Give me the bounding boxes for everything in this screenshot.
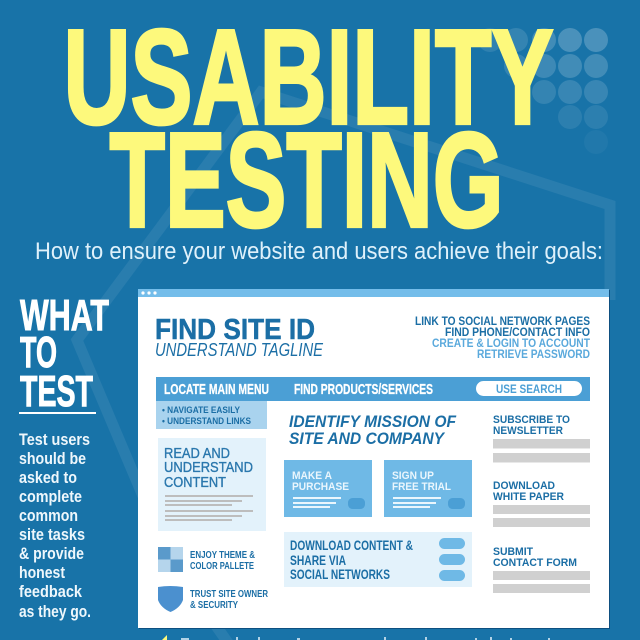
sidebar: white paper: WHITE PAPER	[493, 491, 564, 503]
panel: what to test	[19, 291, 109, 621]
card: make a purchase	[284, 460, 372, 517]
background: faint arrow outline	[77, 92, 610, 640]
text block: what to test description: & provide	[19, 545, 84, 563]
site id heading: FIND SITE ID	[155, 314, 315, 346]
heading: what to test: TO	[20, 328, 57, 377]
theme label: ENJOY THEME &	[190, 550, 255, 561]
text block: what to test description: as they go.	[19, 603, 91, 621]
submenu	[156, 401, 267, 429]
sidebar: white paper: DOWNLOAD	[493, 480, 555, 492]
sidebar: contact form: CONTACT FORM	[493, 557, 577, 569]
top right links: RETRIEVE PASSWORD	[477, 349, 590, 361]
navigation bar: LOCATE MAIN MENU	[164, 382, 269, 398]
theme label: COLOR PALLETE	[190, 561, 254, 572]
text block: what to test description: feedback	[19, 583, 83, 601]
mission heading: SITE AND COMPANY	[289, 430, 446, 448]
card: make a purchase: PURCHASE	[292, 481, 349, 493]
icon: shield	[158, 586, 183, 612]
read content box: READ AND	[164, 446, 230, 462]
icon: yellow marker cropped at bottom edge	[161, 635, 167, 640]
submenu: • NAVIGATE EASILY	[162, 405, 240, 415]
trust label	[190, 589, 269, 611]
heading: what to test	[20, 291, 109, 416]
read content box	[158, 438, 266, 531]
sidebar: subscribe: NEWSLETTER	[493, 425, 563, 437]
text block: what to test description: honest	[19, 564, 65, 582]
sidebar: subscribe: SUBSCRIBE TO	[493, 414, 570, 426]
read content box: UNDERSTAND	[164, 460, 253, 476]
text block: what to test description: asked to	[19, 469, 77, 487]
sidebar: contact form: SUBMIT	[493, 546, 533, 558]
card: sign up free trial: FREE TRIAL	[392, 481, 451, 493]
mission heading	[289, 413, 457, 448]
card: download and share	[284, 532, 472, 587]
trust label: TRUST SITE OWNER	[190, 589, 269, 600]
sidebar: white paper	[493, 480, 590, 527]
site id heading: UNDERSTAND TAGLINE	[155, 340, 324, 360]
submenu: • UNDERSTAND LINKS	[162, 416, 251, 426]
top right links	[415, 316, 590, 361]
site id heading	[155, 314, 324, 360]
subtitle: How to ensure your website and users achieve their goals:	[35, 238, 603, 265]
navigation bar	[156, 377, 590, 401]
card: sign up free trial: SIGN UP	[392, 470, 434, 482]
text block: what to test description: site tasks	[19, 526, 85, 544]
panel: browser window mockup	[138, 289, 610, 629]
background: dot grid	[478, 28, 608, 154]
top right links: FIND PHONE/CONTACT INFO	[445, 327, 590, 339]
theme label	[190, 550, 255, 572]
trust label: & SECURITY	[190, 600, 238, 611]
title	[64, 2, 554, 256]
card: download and share: SOCIAL NETWORKS	[290, 566, 390, 582]
text block: what to test description: common	[19, 507, 78, 525]
navigation bar: FIND PRODUCTS/SERVICES	[294, 382, 433, 398]
text block: what to test description: Test users	[19, 431, 90, 449]
card: sign up free trial	[384, 460, 472, 517]
card: download and share: DOWNLOAD CONTENT &	[290, 537, 413, 553]
icon: color palette	[158, 547, 183, 572]
cropped line of text at bottom edge	[181, 637, 550, 640]
mission heading: IDENTIFY MISSION OF	[289, 413, 457, 431]
navigation bar: USE SEARCH	[496, 384, 562, 396]
top right links: LINK TO SOCIAL NETWORK PAGES	[415, 316, 590, 328]
top right links: CREATE & LOGIN TO ACCOUNT	[432, 338, 590, 350]
text block: what to test description: complete	[19, 488, 82, 506]
card: download and share: SHARE VIA	[290, 552, 346, 568]
window title bar	[138, 289, 609, 297]
heading: what to test: TEST	[20, 367, 93, 416]
text block: what to test description	[19, 431, 91, 621]
text block: what to test description: should be	[19, 450, 86, 468]
sidebar: contact form	[493, 546, 590, 593]
sidebar: subscribe	[493, 414, 590, 462]
read content box: CONTENT	[164, 475, 226, 491]
heading: what to test: WHAT	[20, 291, 109, 340]
card: make a purchase: MAKE A	[292, 470, 332, 482]
